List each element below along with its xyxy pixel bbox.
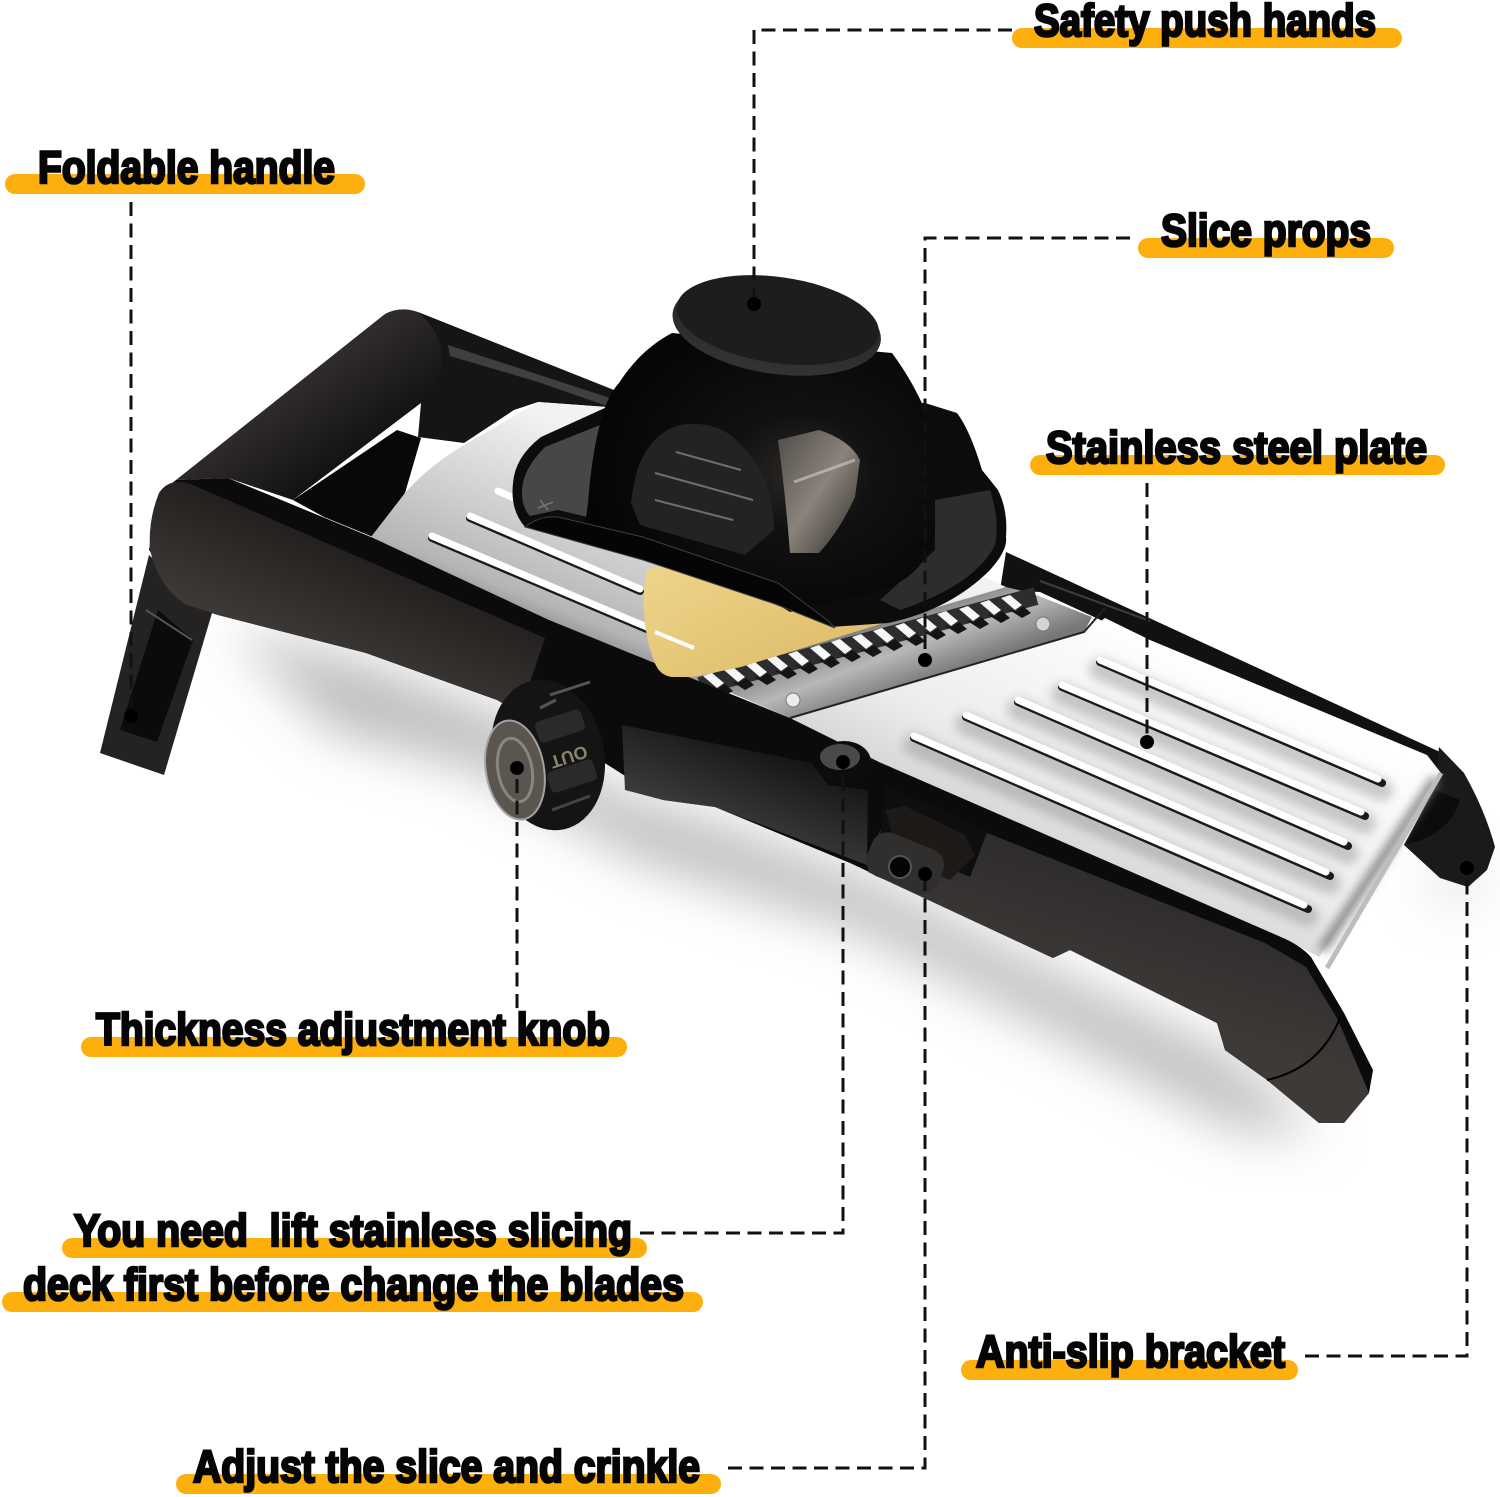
front lip of flange (525, 517, 835, 628)
floor shadow (230, 625, 1495, 1130)
hand guard flange (512, 403, 1006, 627)
inner frame below handle (293, 430, 421, 537)
left folding leg (100, 555, 212, 775)
label: Adjust the slice and crinkle (176, 867, 932, 1494)
hand guard dome (585, 333, 935, 612)
label: Safety push hands (747, 0, 1402, 311)
rivets (786, 693, 800, 707)
label: Anti-slip bracket: Anti-slip bracket (976, 1326, 1285, 1377)
label: Stainless steel plate: Stainless steel plate (1046, 422, 1427, 473)
label: Slice props (918, 205, 1394, 667)
slice props deck (696, 587, 1092, 718)
label: Foldable handle: Foldable handle (38, 142, 335, 193)
label: Anti-slip bracket (961, 861, 1474, 1380)
rail face left (150, 482, 545, 712)
crinkle blade teeth (700, 595, 1036, 696)
deck lift latch (817, 741, 871, 783)
label: lift deck before changing blades: deck first before change the blades (23, 1259, 684, 1310)
label: Slice props: Slice props (1161, 205, 1371, 256)
product: mandoline slicer (100, 263, 1495, 1130)
label: Stainless steel plate (1030, 422, 1445, 749)
label: Foldable handle (5, 142, 365, 723)
rail face middle (622, 725, 868, 865)
potato (644, 555, 884, 677)
back rail right side (1000, 552, 1464, 790)
label: lift deck before changing blades (2, 755, 850, 1312)
label: lift deck before changing blades: You need lift stainless slicing (74, 1205, 632, 1256)
push cap (666, 263, 888, 388)
blade adjust knob (861, 785, 988, 899)
rail body (149, 478, 1373, 1123)
ribs on steel plate (432, 491, 1382, 916)
rail face right (868, 830, 1369, 1123)
foldable handle grip (176, 309, 442, 500)
right anti-slip foot (1404, 747, 1495, 887)
dome reflection (778, 430, 860, 553)
thickness knob: OUT (548, 741, 590, 772)
label: Thickness adjustment knob: Thickness adjustment knob (96, 1004, 610, 1055)
label: Adjust the slice and crinkle: Adjust the slice and crinkle (193, 1441, 700, 1492)
thickness knob (477, 669, 619, 841)
stainless steel plate, upper part (371, 402, 1006, 685)
label: Thickness adjustment knob (81, 761, 627, 1057)
lower steel plate (790, 618, 1441, 957)
back rail left side (418, 312, 614, 443)
